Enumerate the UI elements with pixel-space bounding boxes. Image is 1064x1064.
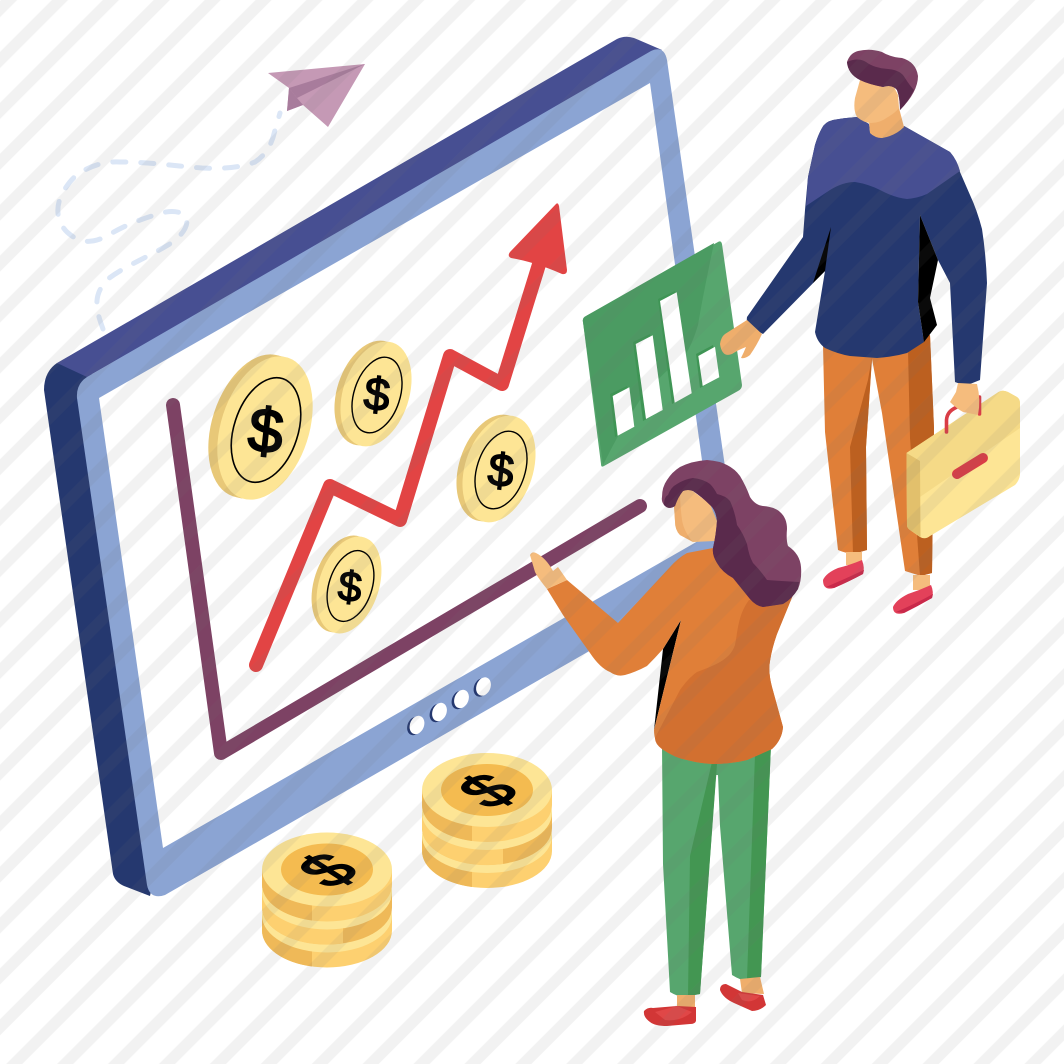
top coin [422, 790, 552, 842]
monitor left side [44, 363, 190, 896]
monitor [44, 37, 739, 896]
coin: top small [322, 331, 424, 456]
coin stack: right: $ [444, 764, 533, 817]
woman torso shadow [654, 620, 681, 730]
briefcase latch [957, 458, 983, 474]
man sweater highlight [806, 117, 960, 206]
coin stack: left: $ [284, 844, 373, 897]
monitor frame [77, 49, 739, 896]
top coin [262, 870, 392, 922]
man hand left [720, 320, 762, 358]
man hair [847, 50, 918, 110]
man with briefcase [720, 50, 1020, 614]
woman sweater [547, 548, 793, 764]
green bar chart panel [583, 241, 742, 467]
coin: top small: $ [362, 367, 392, 421]
middle coin [262, 892, 392, 944]
woman hand [530, 552, 567, 589]
man hand right [950, 383, 979, 415]
bottom coin [422, 836, 552, 888]
coin: large [191, 342, 330, 512]
woman trousers [662, 745, 771, 997]
dashed flight path [58, 113, 280, 329]
bars [613, 292, 719, 436]
middle coin [422, 813, 552, 865]
man shoes [823, 560, 933, 614]
coin: large: $ [245, 395, 287, 468]
coin: lower [300, 527, 393, 642]
coin: right [444, 405, 548, 532]
chart axes [173, 405, 640, 753]
coin stack: left [262, 832, 392, 968]
woman ankles [677, 977, 764, 1008]
rising red arrow [256, 203, 567, 665]
man ankles [846, 552, 930, 590]
woman [530, 460, 801, 1026]
bar shadows [610, 291, 718, 437]
icon: paper plane [268, 64, 365, 127]
man sweater [747, 117, 987, 384]
man torso shadow [813, 215, 938, 342]
man trousers [823, 335, 934, 576]
bottom coin [262, 916, 392, 968]
man neck and face [854, 80, 904, 138]
woman hair [662, 460, 801, 607]
monitor top side [57, 37, 662, 377]
briefcase [906, 391, 1020, 538]
coin stack: right [422, 753, 552, 888]
woman shoes [644, 984, 766, 1026]
monitor buttons [404, 675, 494, 737]
woman face [674, 489, 717, 542]
coin: right: $ [486, 443, 516, 497]
monitor screen [99, 83, 712, 848]
coin: lower: $ [336, 562, 364, 611]
woman sweater shade [655, 595, 793, 764]
briefcase handle [946, 397, 980, 432]
